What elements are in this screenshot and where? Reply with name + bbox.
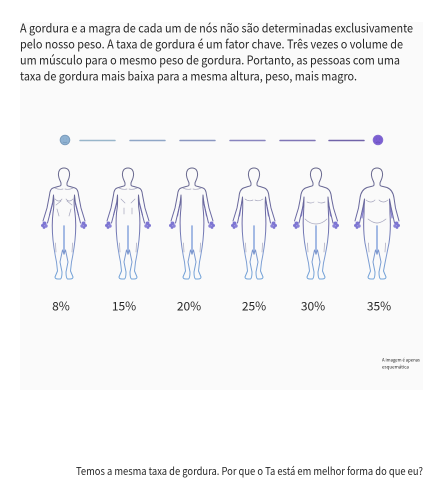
panel: background bbox=[20, 22, 423, 390]
percentage labels: 20% bbox=[177, 298, 201, 314]
percentage labels: 35% bbox=[367, 298, 391, 314]
intro text block: A gordura e a magra de cada um de nós não são determinadas exclusivamente bbox=[20, 20, 413, 36]
note: image is schematic: esquemática bbox=[382, 364, 409, 370]
icon: lean face bbox=[60, 135, 70, 145]
scale dashes bbox=[80, 140, 364, 142]
intro text block bbox=[20, 20, 413, 84]
figure: 20% body fat bbox=[169, 168, 215, 279]
figure: 25% body fat bbox=[231, 168, 277, 279]
percentage labels: 8% bbox=[52, 298, 70, 314]
figure: 15% body fat bbox=[105, 168, 151, 279]
intro text block: pelo nosso peso. A taxa de gordura é um fator chave. Três vezes o volume de bbox=[20, 36, 403, 52]
note: image is schematic: A imagem é apenas bbox=[382, 356, 420, 364]
intro text block: um músculo para o mesmo peso de gordura. Portanto, as pessoas com uma bbox=[20, 52, 400, 68]
figure: 30% body fat bbox=[293, 168, 339, 279]
percentage labels: 30% bbox=[301, 298, 325, 314]
percentage labels bbox=[52, 298, 391, 314]
figure: 35% body fat bbox=[354, 168, 400, 279]
percentage labels: 15% bbox=[112, 298, 136, 314]
note: image is schematic bbox=[382, 356, 420, 370]
figure: 8% body fat bbox=[41, 168, 87, 279]
intro text block: taxa de gordura mais baixa para a mesma altura, peso, mais magro. bbox=[20, 68, 357, 84]
icon: heavy face bbox=[373, 135, 383, 145]
percentage labels: 25% bbox=[242, 298, 266, 314]
scale: body-fat progression from lean to heavy bbox=[60, 135, 383, 145]
